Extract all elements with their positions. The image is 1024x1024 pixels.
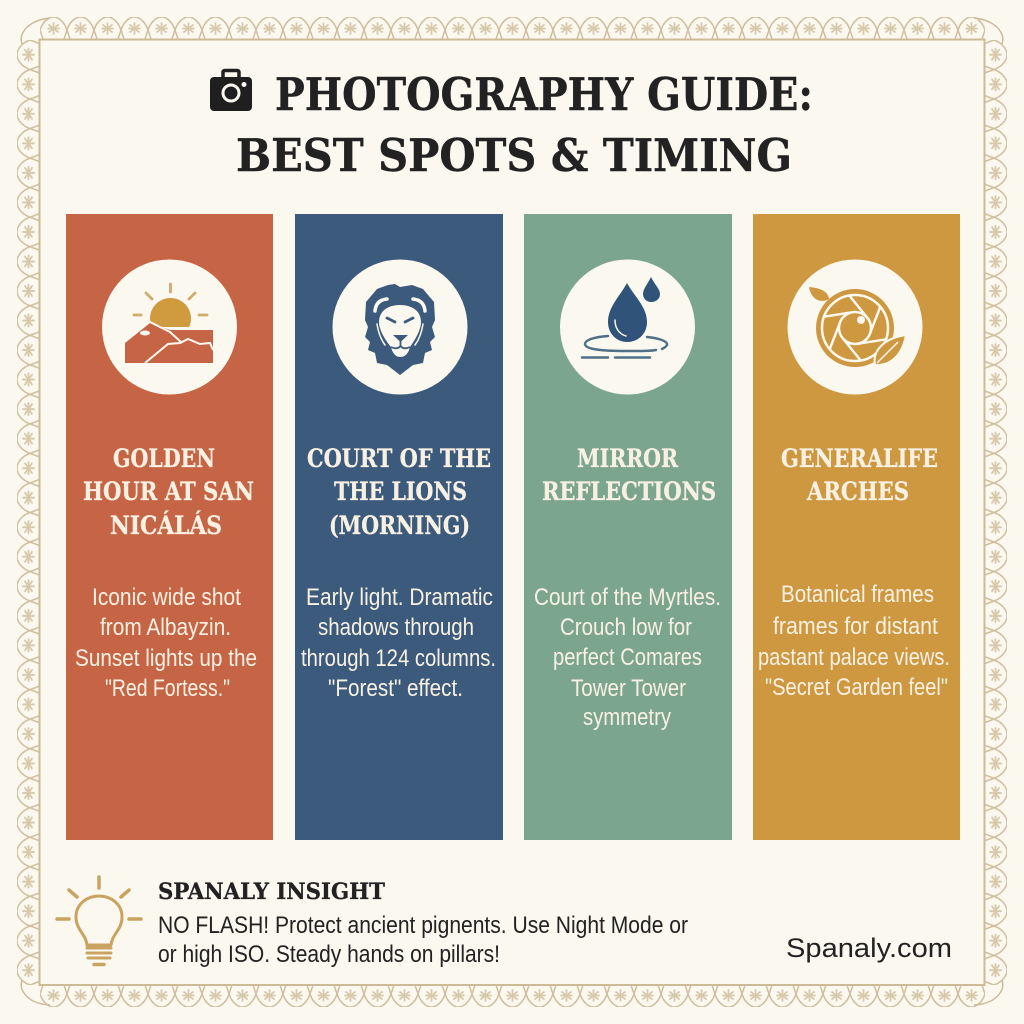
insight callout — [158, 879, 688, 968]
heading: THE LIONS — [334, 477, 467, 506]
description: Early light. Dramatic — [306, 584, 493, 611]
title line 2: BEST SPOTS & TIMING — [236, 129, 792, 182]
description: perfect Comares — [553, 644, 702, 671]
description: Crouch low for — [560, 614, 692, 641]
description: pastant palace views. — [758, 644, 950, 671]
heading: REFLECTIONS — [542, 477, 716, 506]
title — [210, 68, 813, 182]
brand url: Spanaly.com — [786, 933, 952, 963]
description: Tower Tower — [571, 675, 686, 702]
insight text — [158, 912, 688, 968]
heading: MIRROR — [577, 444, 678, 473]
icon: aperture with leaves — [788, 260, 922, 394]
description: from Albayzin. — [100, 614, 231, 641]
heading: (MORNING) — [329, 511, 470, 540]
description: shadows through — [318, 614, 474, 641]
panel: golden hour — [66, 214, 273, 840]
description: through 124 columns. — [301, 645, 496, 672]
title line 1: PHOTOGRAPHY GUIDE: — [275, 68, 813, 121]
heading: HOUR AT SAN — [83, 477, 254, 506]
description: Botanical frames — [781, 581, 934, 608]
heading: COURT OF THE — [307, 444, 491, 473]
panel: mirror reflections — [524, 214, 732, 840]
description: Iconic wide shot — [92, 584, 241, 611]
heading: NICÁLÁS — [110, 511, 222, 540]
description: Court of the Myrtles. — [534, 584, 721, 611]
description: symmetry — [583, 704, 671, 731]
insight text: or high ISO. Steady hands on pillars! — [158, 941, 500, 968]
panel: generalife arches — [753, 214, 960, 840]
description: "Secret Garden feel" — [765, 674, 948, 701]
icon: light bulb — [57, 877, 141, 964]
description: "Forest" effect. — [328, 675, 463, 702]
heading — [83, 444, 254, 540]
description: frames for distant — [773, 613, 938, 640]
insight heading: SPANALY INSIGHT — [158, 879, 386, 905]
heading: ARCHES — [806, 477, 909, 506]
heading: GENERALIFE — [781, 444, 938, 473]
description: "Red Fortess." — [105, 675, 230, 702]
heading — [542, 444, 716, 506]
heading: GOLDEN — [113, 444, 215, 473]
icon: lion — [332, 260, 468, 394]
description — [534, 584, 721, 731]
heading — [307, 444, 491, 540]
description — [301, 584, 496, 702]
insight text: NO FLASH! Protect ancient pignents. Use Night Mode or — [158, 912, 688, 939]
description — [758, 581, 950, 701]
description: Sunset lights up the — [75, 645, 257, 672]
icon: camera — [210, 70, 252, 111]
panel: court of the lions — [295, 214, 503, 840]
description — [75, 584, 257, 702]
icon: water drops — [560, 260, 695, 394]
heading — [781, 444, 938, 506]
icon: sunset over mountains — [102, 260, 237, 394]
